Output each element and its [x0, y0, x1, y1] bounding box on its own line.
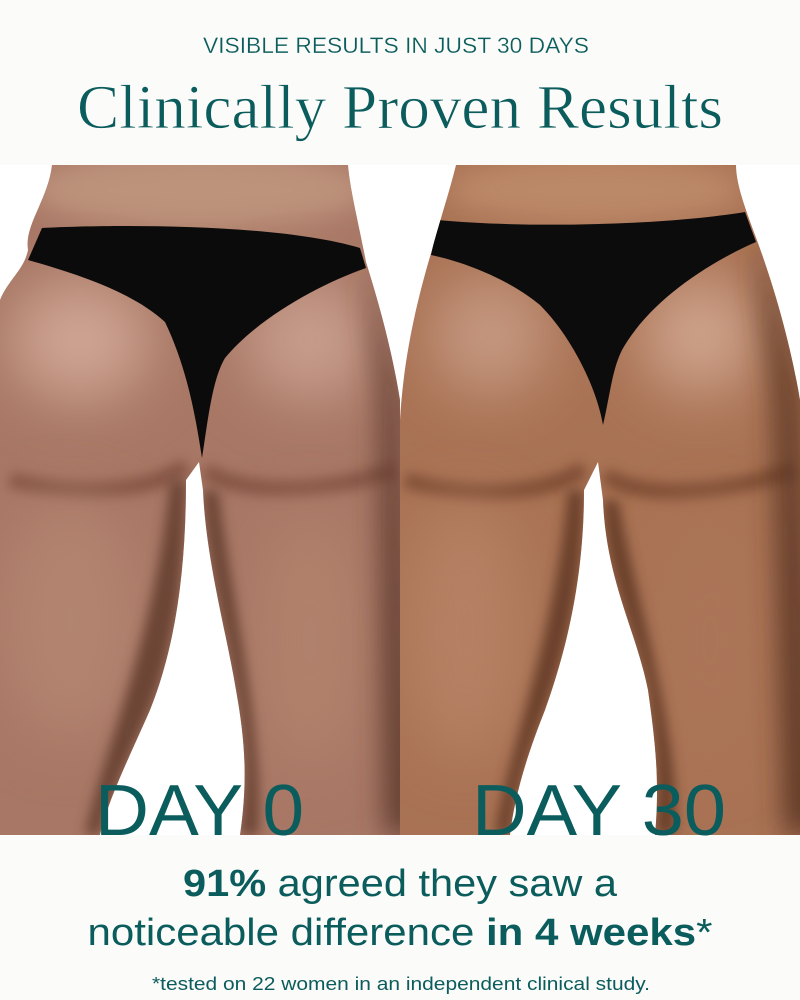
eyebrow heading: VISIBLE RESULTS IN JUST 30 DAYS — [203, 33, 589, 58]
photo panel background — [0, 165, 800, 835]
waist tone — [39, 165, 356, 232]
lower right crease — [605, 470, 795, 491]
waist tone — [446, 165, 744, 224]
lower left crease — [405, 468, 584, 492]
statement line two: noticeable difference in 4 weeks * — [88, 912, 713, 954]
footnote: *tested on 22 women in an independent clinical study. — [152, 974, 650, 994]
outer right shade — [755, 235, 800, 835]
panel: day 30 figure — [400, 155, 800, 835]
right hip highlight — [640, 275, 760, 395]
left hip highlight — [10, 280, 150, 400]
outer right shade — [352, 280, 400, 835]
left hip highlight — [430, 275, 550, 395]
right leg tone — [646, 682, 650, 704]
garment — [431, 212, 756, 425]
lower right crease — [205, 470, 395, 489]
inner leg shade left — [495, 490, 584, 835]
right leg tone — [281, 563, 339, 717]
left leg tone — [405, 500, 525, 760]
garment — [28, 226, 366, 458]
left leg tone — [10, 484, 130, 720]
inner leg shade right — [603, 500, 676, 835]
inner leg shade right — [203, 490, 259, 835]
right hip highlight — [245, 280, 375, 400]
label: day 30: DAY 30 — [472, 771, 726, 851]
label: day 0: DAY 0 — [95, 771, 304, 851]
panel: day 0 figure — [0, 150, 420, 835]
inner leg shade left — [85, 480, 186, 835]
lower left crease — [10, 465, 186, 490]
statement line one: 91% agreed they saw a — [183, 863, 618, 905]
title: Clinically Proven Results — [77, 74, 723, 142]
